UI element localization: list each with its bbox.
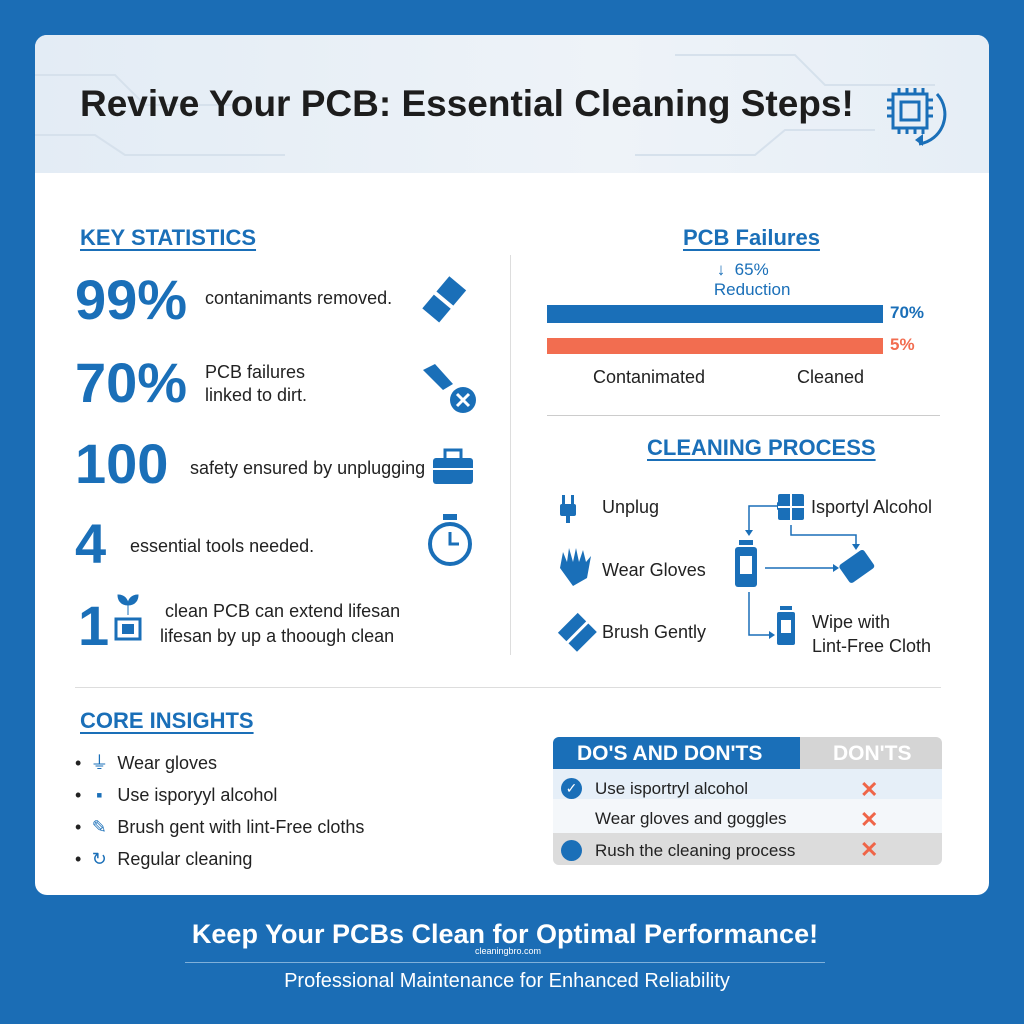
insights list [75, 753, 364, 869]
process steps: Wear Gloves [602, 560, 706, 580]
insights list: • Wear gloves [75, 753, 217, 773]
chart: PCB failures: ↓ 65% [717, 260, 769, 279]
table: dos and donts: Wear gloves and goggles [595, 809, 787, 828]
heading: cleaning process: CLEANING PROCESS [647, 435, 876, 460]
process steps: Lint-Free Cloth [812, 636, 931, 656]
stat 70: 70% [75, 351, 187, 414]
stat 99: contanimants removed. [205, 288, 392, 308]
stat 4: essential tools needed. [130, 536, 314, 556]
table: dos and donts: ✕ [860, 777, 878, 802]
stat 100: 100 [75, 432, 168, 495]
table: dos and donts: ✕ [860, 807, 878, 832]
insights list: ⏚ [90, 753, 108, 773]
chart: PCB failures: 5% [890, 335, 915, 354]
process steps: Brush Gently [602, 622, 706, 642]
process steps [558, 494, 932, 656]
stat 1: lifesan by up a thoough clean [160, 626, 394, 646]
stat 70 [75, 351, 476, 414]
icon: brush [422, 276, 466, 322]
stat 1 [78, 594, 400, 657]
process steps: Isportyl Alcohol [811, 497, 932, 517]
card [35, 35, 989, 895]
insights list: ↻ [92, 849, 107, 869]
chart: PCB failures: Cleaned [797, 367, 864, 387]
table: dos and donts [553, 737, 942, 865]
chart: PCB failures [547, 225, 924, 387]
table: dos and donts: ✕ [860, 837, 878, 862]
icon: toolbox [433, 448, 473, 484]
stat 70: linked to dirt. [205, 385, 307, 405]
insights list: ✎ [92, 817, 107, 837]
heading: key statistics: KEY STATISTICS [80, 225, 256, 250]
stat 100 [75, 432, 473, 495]
icon: chip sprout [114, 594, 142, 640]
process steps: Wipe with [812, 612, 890, 632]
chart: PCB failures: 70% [890, 303, 924, 322]
table: dos and donts: ✓ [566, 780, 577, 796]
stat 99: 99% [75, 268, 187, 331]
table: dos and donts: DON'TS [833, 742, 912, 765]
table: dos and donts: Use isportryl alcohol [595, 779, 748, 798]
title: Revive Your PCB: Essential Cleaning Steps! [80, 83, 854, 124]
stat 1: clean PCB can extend lifesan [165, 601, 400, 621]
footer title: Keep Your PCBs Clean for Optimal Performance! [192, 919, 818, 949]
insights list: • Brush gent with lint-Free cloths [75, 817, 364, 837]
icon: hand x [423, 364, 476, 413]
table: dos and donts: Rush the cleaning process [595, 841, 795, 860]
insights list: • Use isporyyl alcohol [75, 785, 277, 805]
stat 4: 4 [75, 512, 106, 575]
process steps: Unplug [602, 497, 659, 517]
insights list: ▪ [96, 785, 102, 805]
table: dos and donts: DO'S AND DON'TS [577, 742, 762, 765]
stat 70: PCB failures [205, 362, 305, 382]
icon: stopwatch [428, 514, 472, 566]
chart: PCB failures: Contanimated [593, 367, 705, 387]
stat 99 [75, 268, 466, 331]
footer subtitle: Professional Maintenance for Enhanced Reliability [284, 970, 730, 992]
stat 1: 1 [78, 594, 109, 657]
stat 4 [75, 512, 472, 575]
chart: PCB failures: PCB Failures [683, 225, 820, 250]
header band [35, 35, 989, 173]
icon: chip refresh [887, 88, 946, 146]
text: cleaningbro.com [475, 946, 541, 956]
chart: PCB failures: Reduction [714, 280, 790, 299]
stat 100: safety ensured by unplugging [190, 458, 425, 478]
insights list: • Regular cleaning [75, 849, 252, 869]
heading: core insights: CORE INSIGHTS [80, 708, 254, 733]
